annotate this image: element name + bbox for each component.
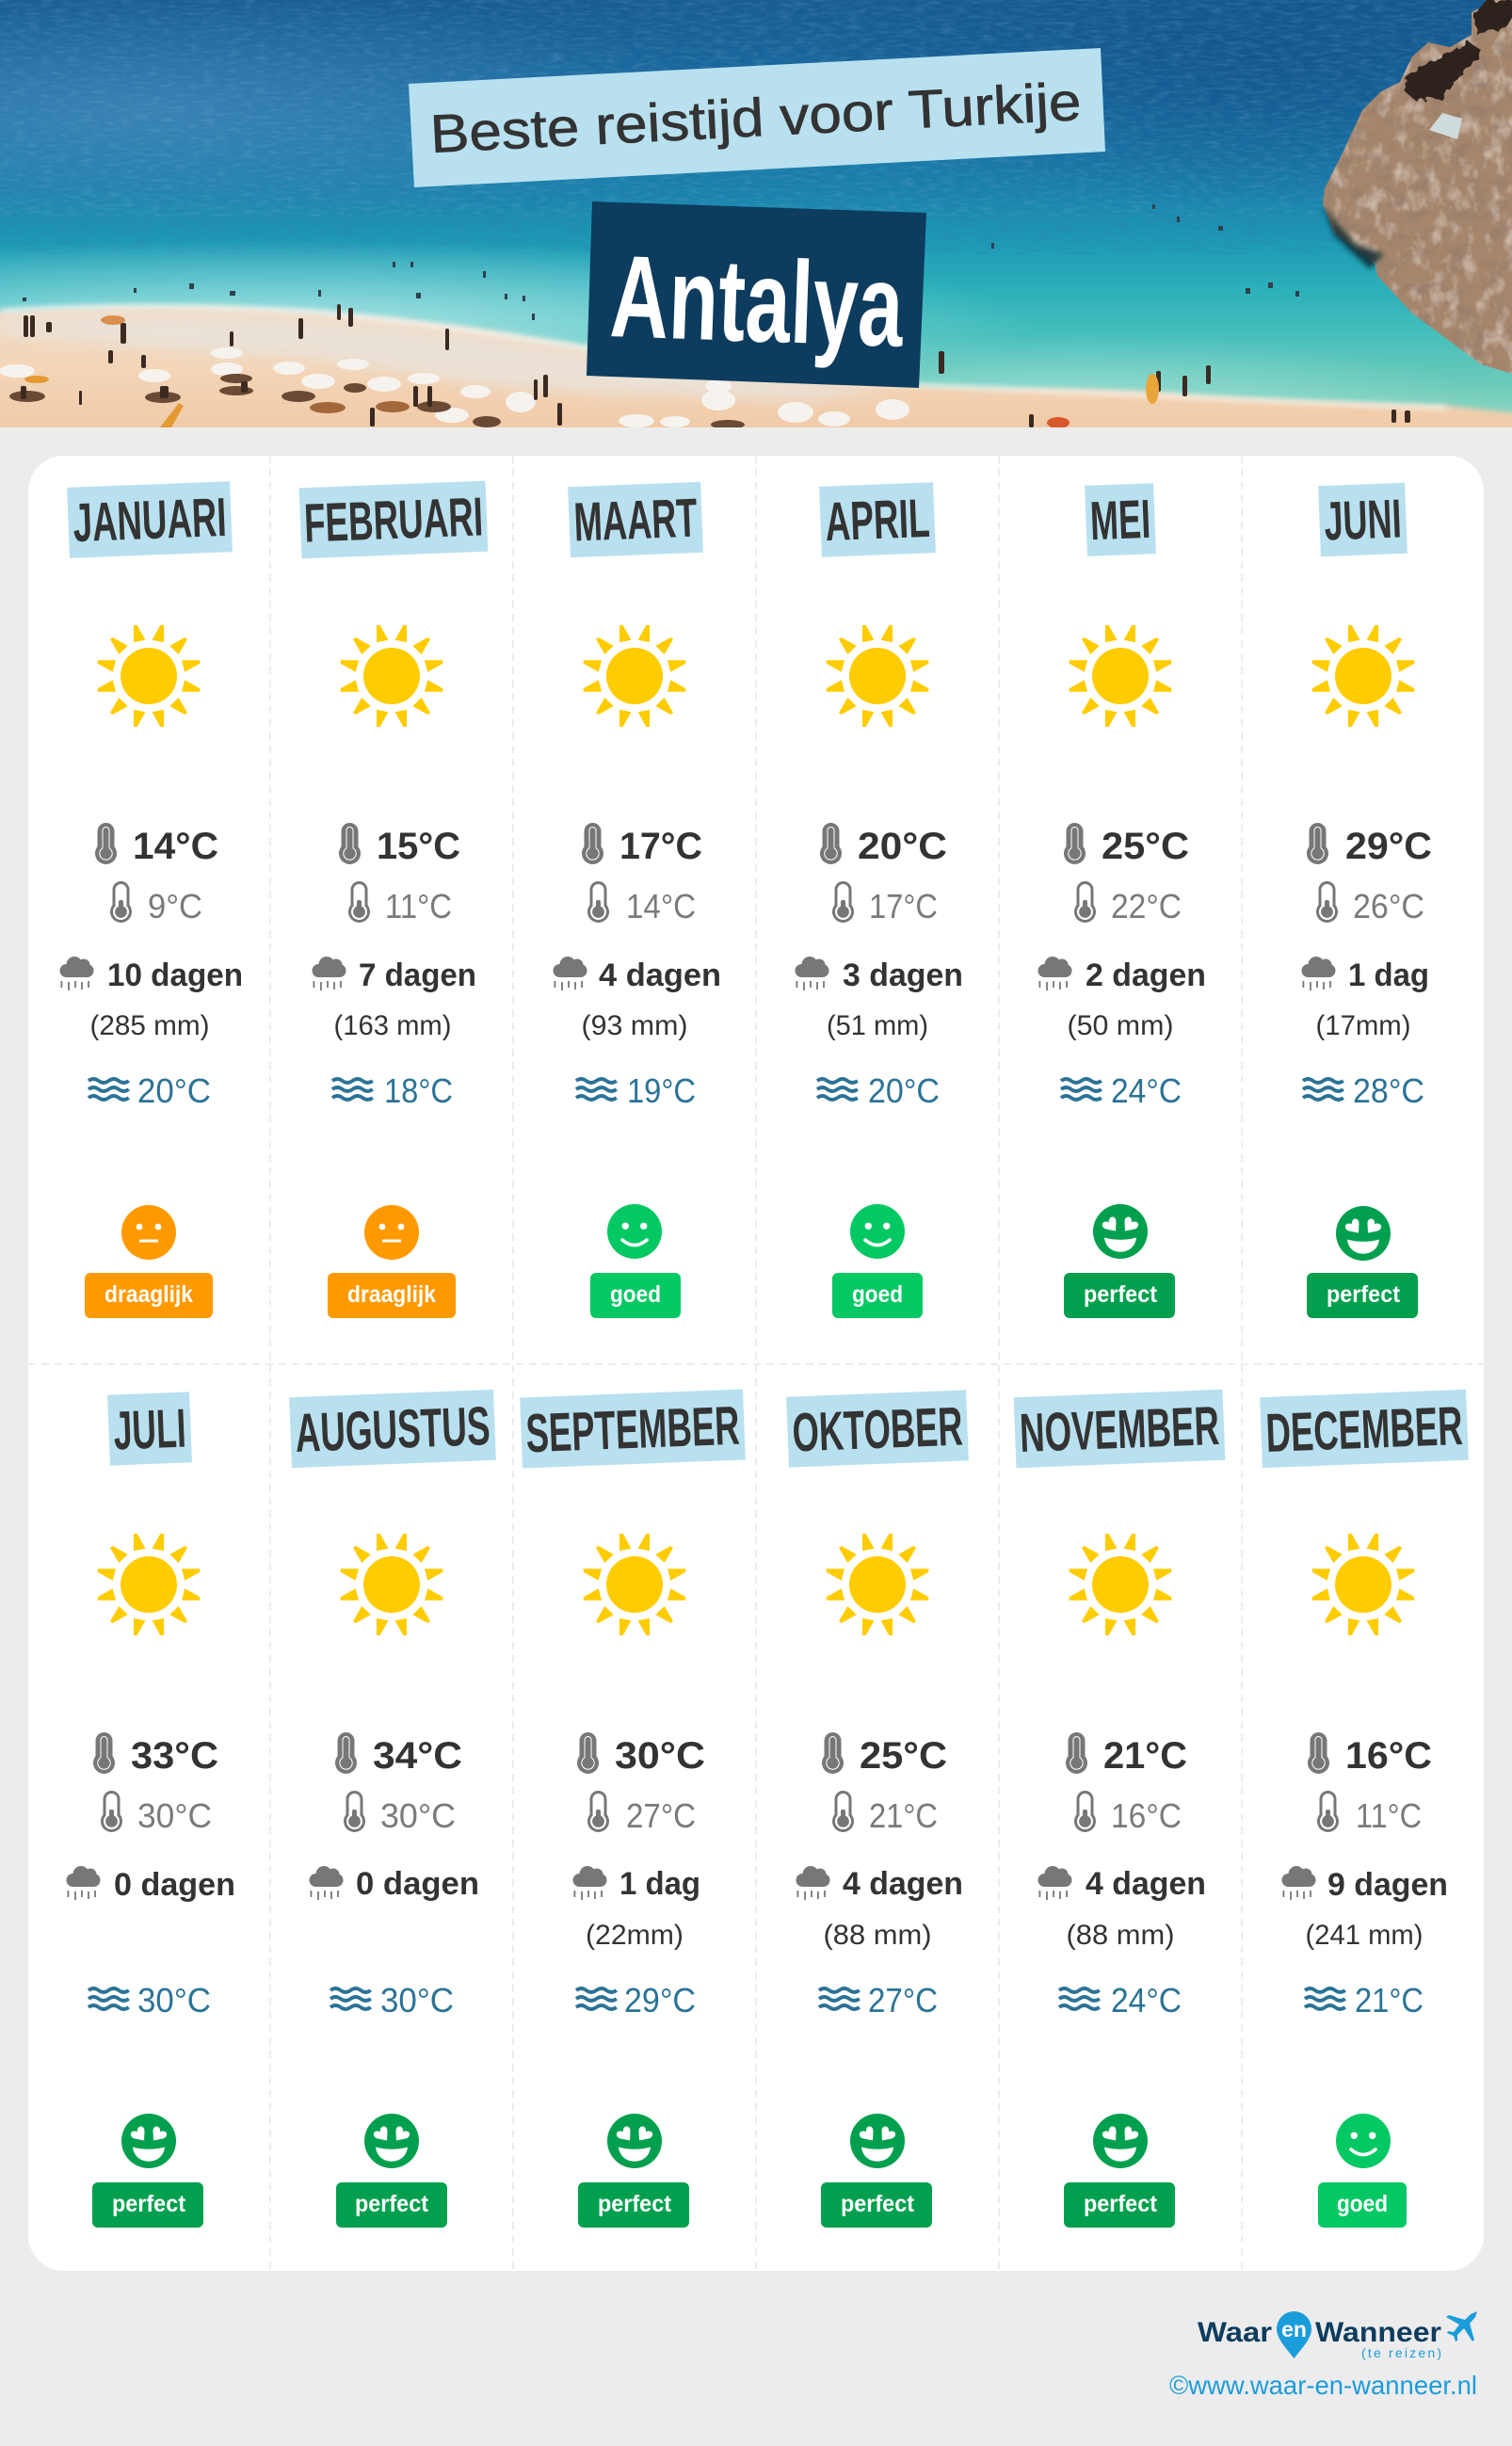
min temperature — [348, 881, 452, 925]
rain days: 2 dagen — [1086, 957, 1206, 993]
max temperature: 15°C — [377, 826, 460, 867]
rating badge: perfect — [841, 2191, 915, 2217]
max temperature — [1308, 1732, 1432, 1777]
max temperature — [820, 823, 947, 867]
cell: juli — [66, 1392, 235, 2228]
rain days — [572, 1866, 700, 1902]
sea temperature: 28°C — [1353, 1071, 1424, 1110]
rating badge: goed — [610, 1281, 661, 1308]
rain days — [1037, 957, 1206, 993]
max temperature — [339, 823, 460, 867]
min temperature: 11°C — [1356, 1796, 1422, 1835]
rain days — [66, 1866, 235, 1903]
cell: maart — [554, 482, 721, 1318]
icon: rating face — [850, 2114, 905, 2168]
rain days: 0 dagen — [356, 1866, 479, 1902]
month label: mei — [1085, 483, 1156, 556]
month label: april: APRIL — [824, 488, 931, 553]
sea temperature — [1061, 1071, 1182, 1110]
rating badge — [1307, 1273, 1418, 1318]
icon: map pin — [1277, 2311, 1311, 2358]
month label: oktober: OKTOBER — [791, 1396, 964, 1463]
cell: februari — [299, 481, 488, 1318]
icon: sun — [98, 1534, 200, 1635]
max temperature: 16°C — [1345, 1735, 1432, 1777]
min temperature — [101, 1791, 212, 1835]
icon: sun — [827, 625, 928, 727]
min temperature: 11°C — [385, 887, 452, 925]
rating badge — [578, 2182, 689, 2228]
sea temperature — [817, 1071, 940, 1110]
rating badge — [832, 1273, 923, 1318]
sea temperature — [576, 1071, 696, 1110]
logo: Waar en Wanneer: (te reizen) — [1361, 2345, 1441, 2360]
rainfall: (88 mm) — [823, 1920, 932, 1951]
cell: december — [1260, 1390, 1469, 2228]
sea temperature: 24°C — [1111, 1981, 1182, 2020]
cell: juni — [1301, 483, 1432, 1318]
sea temperature — [88, 1981, 211, 2020]
icon: rating face — [607, 1204, 662, 1259]
min temperature: 27°C — [626, 1796, 696, 1835]
month label: mei: MEI — [1089, 489, 1151, 552]
month label: maart: MAART — [572, 488, 699, 553]
icon: sun — [584, 1534, 685, 1635]
rain days: 1 dag — [619, 1866, 700, 1902]
rain days — [313, 957, 476, 993]
rain days: 1 dag — [1348, 957, 1429, 993]
max temperature: 14°C — [133, 826, 218, 867]
rain days: 10 dagen — [107, 957, 243, 993]
min temperature: 21°C — [869, 1796, 938, 1835]
city banner: Antalya — [587, 201, 926, 388]
rating badge — [1064, 2182, 1175, 2228]
min temperature — [587, 1791, 696, 1835]
rating badge — [92, 2182, 203, 2228]
rating badge: draaglijk — [105, 1281, 193, 1308]
min temperature — [587, 881, 696, 925]
rating badge — [336, 2182, 447, 2228]
month label: februari — [299, 481, 488, 558]
month label: maart — [568, 482, 703, 557]
month label: november — [1014, 1390, 1225, 1468]
max temperature: 33°C — [131, 1735, 218, 1777]
sea temperature — [1303, 1071, 1424, 1110]
icon: map pin: en — [1281, 2317, 1307, 2341]
icon: rating face — [121, 2114, 176, 2168]
sea temperature — [1059, 1981, 1182, 2020]
sea temperature — [576, 1981, 696, 2020]
icon: sun — [341, 1534, 442, 1635]
sea temperature: 30°C — [380, 1981, 454, 2020]
month label: juli — [107, 1392, 192, 1466]
icon: rating face — [1336, 2114, 1391, 2168]
rating badge — [590, 1273, 681, 1318]
sea temperature: 18°C — [384, 1071, 453, 1110]
max temperature — [822, 1732, 947, 1777]
rainfall: (50 mm) — [1068, 1010, 1173, 1041]
icon: sun — [584, 625, 685, 727]
title banner: Beste reistijd voor Turkije — [428, 72, 1083, 165]
rainfall: (17mm) — [1316, 1010, 1410, 1041]
month label: januari: JANUARI — [72, 487, 228, 554]
min temperature — [344, 1791, 456, 1835]
cell: september — [520, 1389, 746, 2228]
icon: rating face — [364, 1205, 419, 1260]
sea temperature: 20°C — [137, 1071, 211, 1110]
max temperature: 17°C — [619, 826, 702, 867]
min temperature: 30°C — [137, 1796, 212, 1835]
month label: juli: JULI — [112, 1398, 187, 1461]
max temperature — [1307, 823, 1432, 867]
rating badge — [821, 2182, 932, 2228]
max temperature — [1066, 1732, 1187, 1777]
max temperature: 29°C — [1345, 826, 1432, 867]
month label: augustus: AUGUSTUS — [294, 1395, 491, 1464]
icon: sun — [1312, 625, 1414, 727]
month label: september — [520, 1389, 746, 1469]
month label: oktober — [786, 1390, 969, 1468]
title banner — [409, 48, 1105, 187]
rainfall: (88 mm) — [1066, 1920, 1175, 1951]
icon: rating face — [1093, 2114, 1148, 2168]
min temperature: 9°C — [148, 887, 202, 925]
rainfall: (163 mm) — [333, 1010, 452, 1041]
rating badge: perfect — [1327, 1281, 1401, 1308]
min temperature: 26°C — [1353, 887, 1424, 925]
rating badge — [1064, 1273, 1175, 1318]
cell: mei — [1037, 483, 1206, 1318]
month label: september: SEPTEMBER — [524, 1395, 741, 1464]
max temperature: 25°C — [1102, 826, 1189, 867]
month label: augustus — [289, 1390, 496, 1468]
rainfall: (51 mm) — [827, 1010, 928, 1041]
sea temperature — [330, 1981, 454, 2020]
min temperature: 14°C — [626, 887, 696, 925]
month label: januari — [67, 481, 233, 558]
sea temperature — [819, 1981, 938, 2020]
hero photo: beach and sea — [0, 0, 1512, 466]
rating badge — [328, 1273, 456, 1318]
logo: Waar en Wanneer: Waar — [1198, 2317, 1272, 2348]
icon: sun — [98, 625, 200, 727]
min temperature — [1074, 1791, 1182, 1835]
rating badge — [1318, 2182, 1407, 2228]
rainfall: (22mm) — [586, 1920, 684, 1951]
logo: Waar en Wanneer — [1198, 2311, 1477, 2360]
sea temperature: 24°C — [1111, 1071, 1182, 1110]
cell: januari — [60, 481, 243, 1318]
icon: sun — [1312, 1534, 1414, 1635]
min temperature: 16°C — [1111, 1796, 1182, 1835]
max temperature — [577, 1732, 705, 1777]
icon: sun — [1070, 625, 1171, 727]
cell: oktober — [786, 1390, 969, 2228]
max temperature: 34°C — [373, 1735, 462, 1777]
max temperature — [95, 823, 218, 867]
rain days — [795, 957, 963, 993]
icon: rating face — [364, 2114, 419, 2168]
icon: sun — [341, 625, 442, 727]
rain days: 4 dagen — [843, 1866, 963, 1902]
month label: februari: FEBRUARI — [303, 486, 484, 555]
icon: sun — [827, 1534, 928, 1635]
min temperature: 22°C — [1111, 887, 1182, 925]
max temperature: 30°C — [615, 1735, 705, 1777]
min temperature — [110, 881, 202, 925]
rating badge: draaglijk — [347, 1281, 436, 1308]
rain days: 4 dagen — [1086, 1866, 1206, 1902]
rain days: 4 dagen — [599, 957, 721, 993]
min temperature — [1316, 881, 1424, 925]
rain days: 7 dagen — [359, 957, 476, 993]
sea temperature: 27°C — [868, 1981, 938, 2020]
panel: month grid card — [28, 456, 1484, 2271]
source url: ©www.waar-en-wanneer.nl — [1169, 2371, 1477, 2400]
max temperature: 25°C — [860, 1735, 947, 1777]
logo: Waar en Wanneer: Wanneer — [1315, 2317, 1441, 2348]
rating badge — [85, 1273, 213, 1318]
rating badge: goed — [852, 1281, 903, 1308]
min temperature — [1317, 1791, 1422, 1835]
cell: november — [1014, 1390, 1225, 2228]
icon: rating face — [121, 1205, 176, 1260]
sea temperature: 19°C — [627, 1071, 696, 1110]
max temperature: 21°C — [1103, 1735, 1187, 1777]
min temperature: 17°C — [869, 887, 938, 925]
cell: april — [795, 482, 963, 1318]
rating badge: perfect — [112, 2191, 186, 2217]
min temperature: 30°C — [380, 1796, 456, 1835]
min temperature — [832, 1791, 938, 1835]
sea temperature: 29°C — [624, 1981, 696, 2020]
max temperature — [582, 823, 702, 867]
city banner: Antalya: Antalya — [608, 232, 906, 372]
min temperature — [1074, 881, 1182, 925]
sea temperature: 30°C — [137, 1981, 211, 2020]
cell: augustus — [289, 1390, 496, 2228]
month label: juni: JUNI — [1323, 488, 1403, 553]
rating badge: goed — [1337, 2191, 1388, 2217]
month label: juni — [1318, 483, 1407, 556]
min temperature — [832, 881, 938, 925]
rainfall: (285 mm) — [90, 1010, 209, 1041]
icon: rating face — [607, 2114, 662, 2168]
sea temperature — [1305, 1981, 1424, 2020]
max temperature — [1064, 823, 1189, 867]
icon: rating face — [850, 1204, 905, 1259]
max temperature — [93, 1732, 218, 1777]
rain days — [1301, 957, 1429, 993]
icon: rating face — [1336, 1206, 1391, 1261]
rating badge: perfect — [1084, 2191, 1158, 2217]
sea temperature — [88, 1071, 211, 1110]
month label: april — [819, 482, 936, 557]
rating badge: perfect — [355, 2191, 429, 2217]
month label: november: NOVEMBER — [1019, 1395, 1220, 1464]
rain days: 9 dagen — [1327, 1867, 1448, 1903]
rain days: 3 dagen — [843, 957, 963, 993]
icon: airplane — [1446, 2311, 1477, 2341]
rain days: 0 dagen — [114, 1867, 235, 1903]
rainfall: (241 mm) — [1305, 1920, 1424, 1951]
max temperature — [335, 1732, 462, 1777]
max temperature: 20°C — [858, 826, 947, 867]
rainfall: (93 mm) — [582, 1010, 687, 1041]
icon: sun — [1070, 1534, 1171, 1635]
rating badge: perfect — [1084, 1281, 1158, 1308]
icon: rating face — [1093, 1204, 1148, 1259]
sea temperature: 21°C — [1355, 1981, 1424, 2020]
rating badge: perfect — [598, 2191, 672, 2217]
sea temperature: 20°C — [868, 1071, 940, 1110]
sea temperature — [332, 1071, 453, 1110]
